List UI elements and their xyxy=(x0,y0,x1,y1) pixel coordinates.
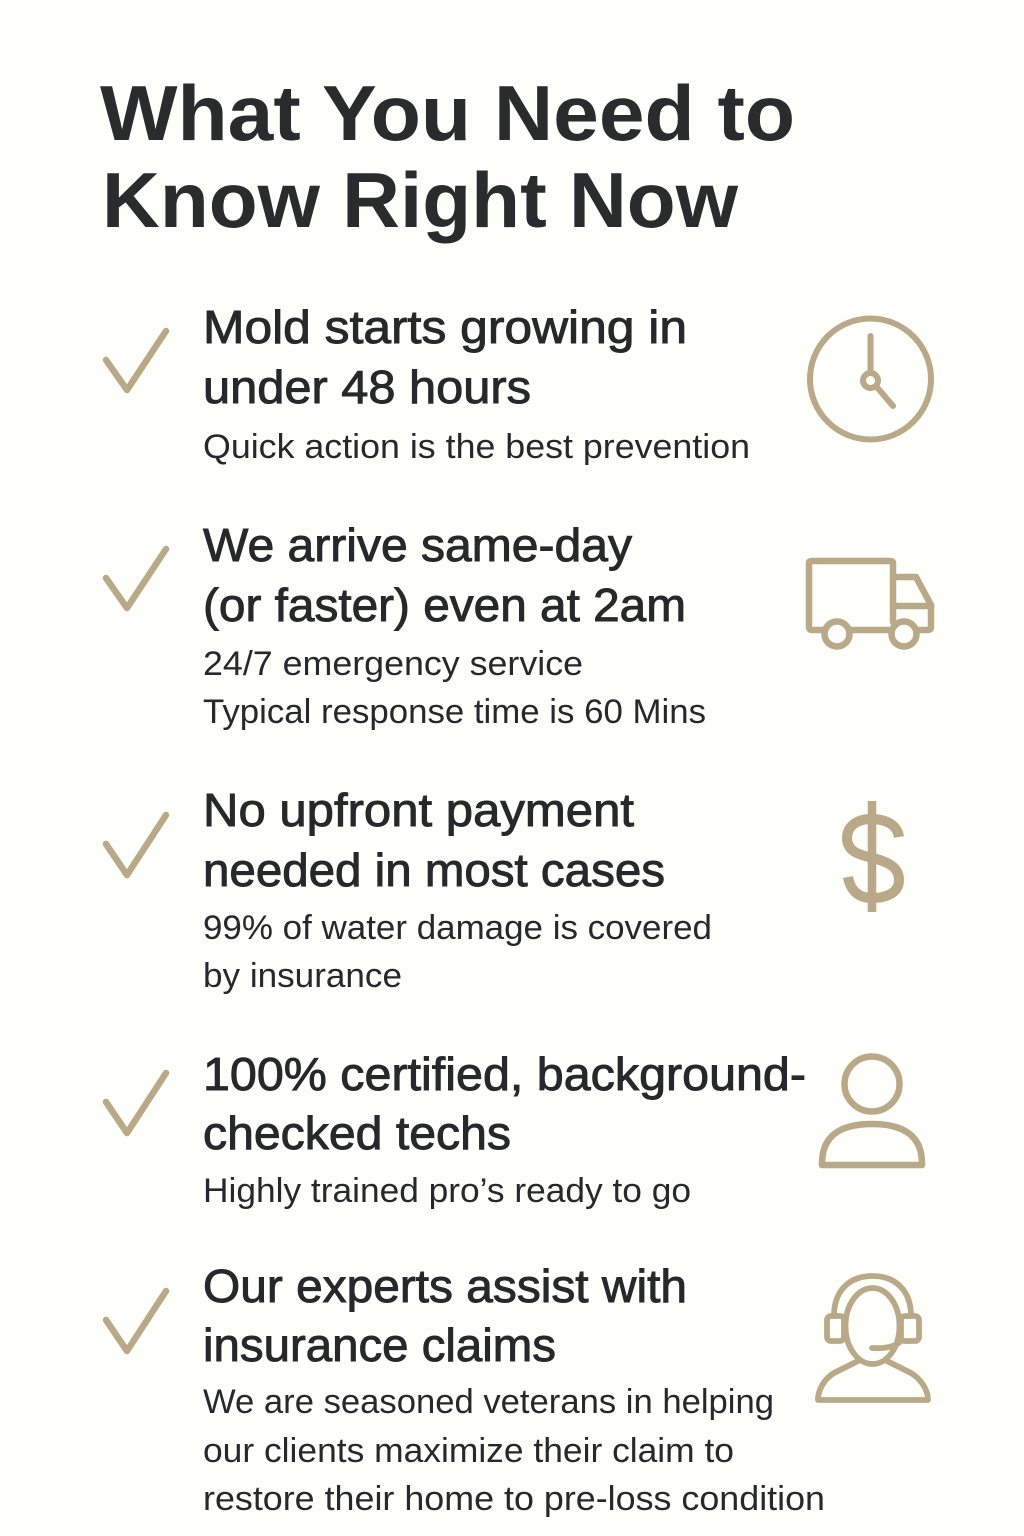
heading: claims: insurance claims xyxy=(203,1319,556,1371)
title: Know Right Now xyxy=(102,156,738,244)
icon: check mark 2 xyxy=(106,549,166,608)
heading: technicians: 100% certified, background- xyxy=(203,1048,806,1100)
heading: payment: needed in most cases xyxy=(203,844,665,896)
text: payment detail xyxy=(203,909,712,995)
icon: check mark 3 xyxy=(106,815,166,875)
panel: insurance claims item xyxy=(106,1260,928,1518)
title: What You Need to xyxy=(100,69,795,157)
icon: check mark 5 xyxy=(106,1291,166,1351)
text: arrival detail: 24/7 emergency service xyxy=(203,645,583,683)
heading: mold xyxy=(203,301,687,413)
panel: payment item xyxy=(106,784,899,995)
icon: check mark 4 xyxy=(106,1073,166,1133)
text: payment detail: 99% of water damage is covered xyxy=(203,909,712,947)
text: arrival detail: Typical response time is 60 Mins xyxy=(203,693,706,731)
heading: mold: under 48 hours xyxy=(203,361,531,413)
panel: technicians item xyxy=(106,1048,922,1210)
text: claims detail: We are seasoned veterans in helping xyxy=(203,1383,774,1421)
heading: technicians: checked techs xyxy=(203,1107,511,1159)
icon: person xyxy=(822,1056,922,1165)
text: technicians detail: Highly trained pro’s ready to go xyxy=(203,1172,691,1210)
heading: payment xyxy=(203,784,665,896)
heading: claims: Our experts assist with xyxy=(203,1260,687,1312)
heading: technicians xyxy=(203,1048,806,1159)
icon: headset agent xyxy=(818,1276,928,1400)
text: arrival detail xyxy=(203,645,706,731)
heading: mold: Mold starts growing in xyxy=(203,301,687,353)
text: claims detail: our clients maximize their claim to xyxy=(203,1432,734,1470)
heading: arrival: (or faster) even at 2am xyxy=(203,579,686,631)
heading: arrival xyxy=(203,519,686,631)
text: mold detail: Quick action is the best prevention xyxy=(203,428,750,466)
text: claims detail xyxy=(203,1383,825,1518)
heading: payment: No upfront payment xyxy=(203,784,634,836)
icon: truck xyxy=(809,561,931,646)
heading: arrival: We arrive same-day xyxy=(203,519,632,571)
panel: mold item xyxy=(106,301,931,466)
icon: clock xyxy=(810,318,931,440)
text: payment detail: by insurance xyxy=(203,957,402,995)
icon: dollar sign xyxy=(847,801,899,912)
icon: check mark 1 xyxy=(106,331,166,390)
heading: claims xyxy=(203,1260,687,1371)
text: claims detail: restore their home to pre-loss condition xyxy=(203,1480,825,1518)
title xyxy=(100,69,795,244)
panel: arrival item xyxy=(106,519,931,731)
